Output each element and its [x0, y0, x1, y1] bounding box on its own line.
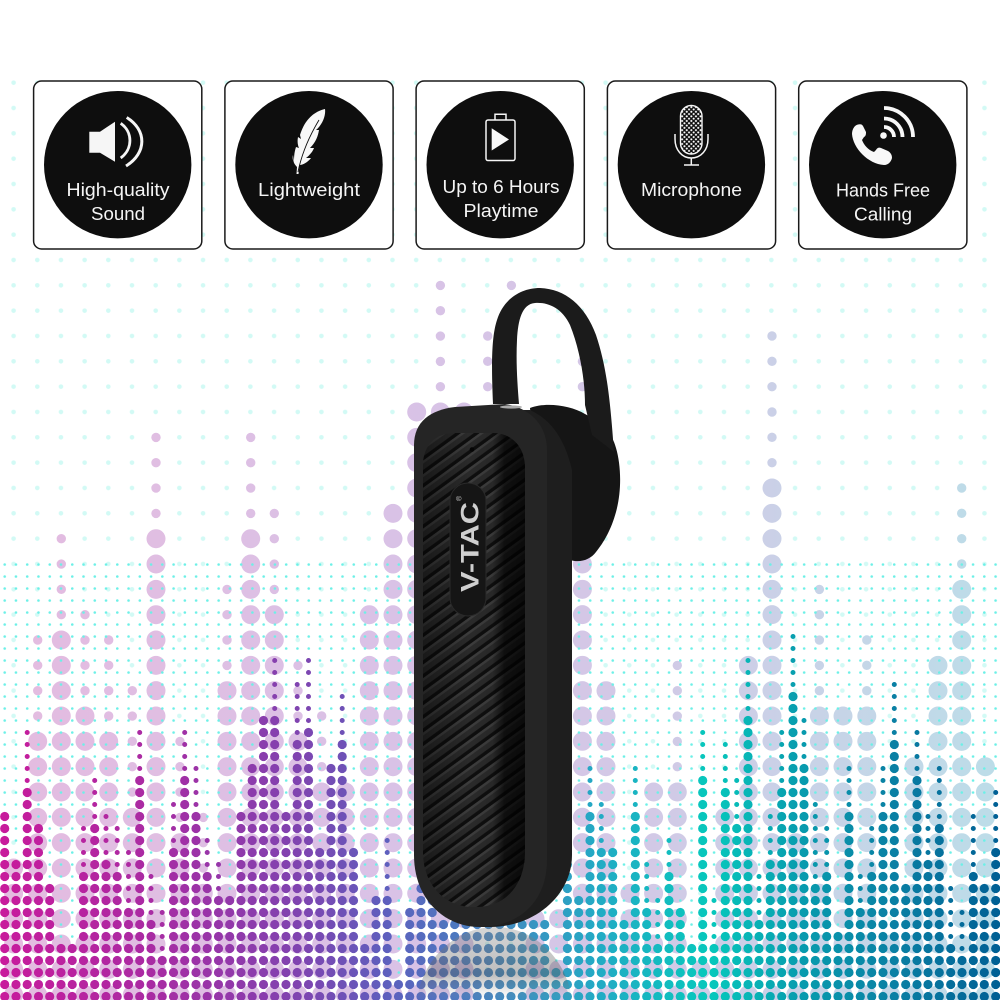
- headset product: [414, 288, 620, 927]
- card: Hands Free Calling: [799, 81, 967, 249]
- label: Microphone: [641, 179, 742, 200]
- ear tip: [530, 405, 620, 561]
- dense cyan dot grid: [0, 558, 1000, 1000]
- label: High-quality: [66, 179, 170, 200]
- label: [66, 179, 170, 224]
- logo button: [450, 483, 486, 616]
- card: Microphone: [607, 81, 776, 249]
- card: Lightweight: [225, 81, 393, 249]
- card: Up to 6 Hours Playtime: [416, 81, 584, 249]
- label: Calling: [854, 204, 912, 224]
- logo button: V-TAC: [458, 502, 485, 592]
- icon: phone with signal: [852, 108, 913, 165]
- icon: speaker: [89, 118, 142, 166]
- logo button: ®: [456, 495, 464, 501]
- label: Up to 6 Hours: [442, 176, 560, 197]
- label: [442, 176, 560, 221]
- icon: microphone: [675, 106, 708, 165]
- label: Playtime: [464, 200, 538, 221]
- icon: feather: [293, 109, 325, 174]
- label: [836, 180, 930, 224]
- saturated gradient equalizer columns: [5, 636, 996, 1000]
- microphone hole: [470, 447, 474, 452]
- ear hook: [492, 288, 614, 452]
- label: Lightweight: [258, 179, 360, 200]
- body rear shell: [480, 410, 572, 927]
- icon: battery with play symbol: [486, 114, 515, 160]
- body front frame: [414, 404, 547, 927]
- ribbed panel: [423, 433, 525, 907]
- label: Hands Free: [836, 180, 930, 200]
- top highlight: [500, 405, 522, 409]
- earpiece reflection: [417, 927, 572, 1000]
- label: Sound: [91, 203, 145, 224]
- card: High-quality Sound: [34, 81, 202, 249]
- light halftone equalizer columns: [14, 285, 985, 1000]
